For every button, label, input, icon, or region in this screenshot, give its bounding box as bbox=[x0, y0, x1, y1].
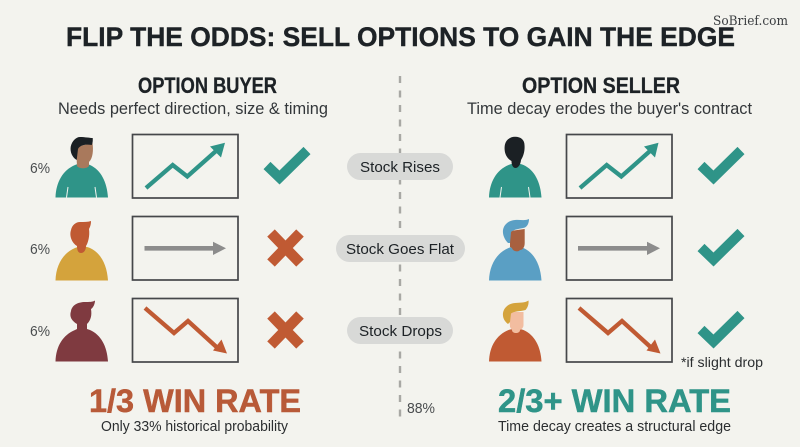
panel: option seller bbox=[467, 73, 763, 435]
icon: check bbox=[701, 314, 741, 342]
icon: yellow person bbox=[56, 221, 108, 280]
pill: stock goes flat: Stock Goes Flat bbox=[346, 242, 454, 258]
chart box: flat arrow bbox=[566, 216, 672, 280]
subtitle: buyer: Needs perfect direction, size & timing bbox=[58, 100, 328, 118]
icon: maroon person bbox=[56, 300, 108, 362]
icon: blue person bbox=[489, 219, 542, 280]
pill: stock drops: Stock Drops bbox=[359, 324, 442, 340]
footnote: *if slight drop bbox=[681, 354, 763, 370]
icon: cross bbox=[271, 233, 300, 263]
chart box: rising line bbox=[566, 134, 672, 198]
watermark: SoBrief.com bbox=[713, 14, 788, 29]
label: 6% row 2: 6% bbox=[30, 242, 50, 258]
heading: option buyer: OPTION BUYER bbox=[138, 73, 277, 98]
chart box: flat arrow bbox=[132, 216, 238, 280]
chart box: falling line bbox=[566, 298, 672, 362]
heading: option seller: OPTION SELLER bbox=[522, 73, 680, 98]
stat: 2/3+ win rate: 2/3+ WIN RATE bbox=[498, 383, 731, 419]
label: 88%: 88% bbox=[407, 401, 435, 417]
caption: seller edge: Time decay creates a structural edge bbox=[498, 419, 731, 435]
pill: stock goes flat bbox=[336, 235, 465, 262]
chart box: falling line bbox=[132, 298, 238, 362]
subtitle: seller: Time decay erodes the buyer's contract bbox=[467, 100, 752, 118]
icon: orange person, blond hair bbox=[489, 300, 542, 362]
icon: cross bbox=[271, 315, 300, 345]
label: 6% row 3: 6% bbox=[30, 324, 50, 340]
panel: option buyer bbox=[30, 73, 328, 435]
label: 6% row 1: 6% bbox=[30, 161, 50, 177]
stat: 1/3 win rate: 1/3 WIN RATE bbox=[89, 383, 301, 419]
pill: stock rises: Stock Rises bbox=[360, 160, 440, 176]
icon: check bbox=[267, 150, 307, 178]
pill: stock drops bbox=[347, 317, 453, 344]
caption: buyer probability: Only 33% historical probability bbox=[101, 419, 289, 435]
pill: stock rises bbox=[347, 153, 453, 180]
icon: check bbox=[701, 232, 741, 260]
icon: teal person bbox=[56, 137, 108, 198]
icon: check bbox=[701, 150, 741, 178]
icon: teal person, black hair bbox=[489, 137, 542, 198]
title: FLIP THE ODDS: SELL OPTIONS TO GAIN THE EDGE bbox=[66, 22, 735, 52]
chart box: rising line bbox=[132, 134, 238, 198]
